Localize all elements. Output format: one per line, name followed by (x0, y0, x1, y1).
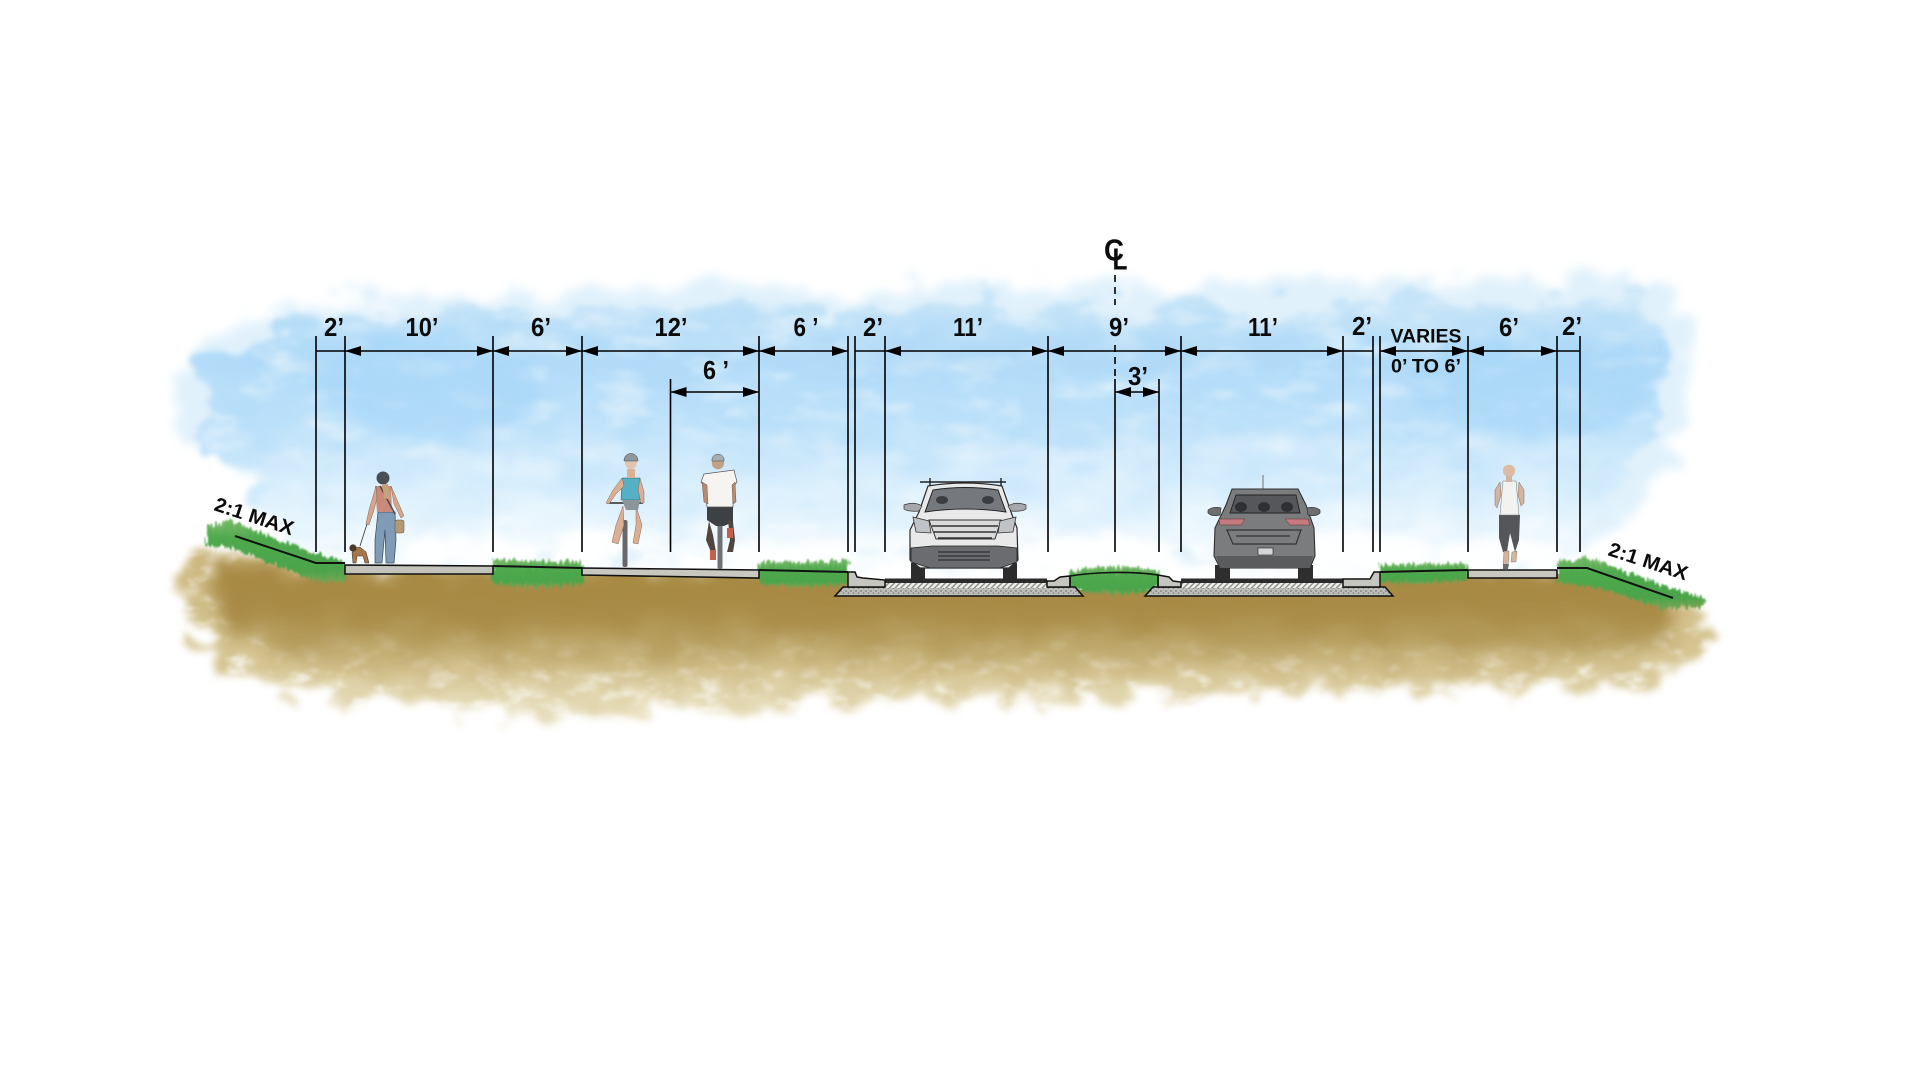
license plate (1258, 548, 1273, 555)
label 11ft lane: 11’ (953, 312, 983, 342)
label 0 to 6: 0’ TO 6’ (1391, 356, 1461, 378)
right slope label: 2:1 MAX (1606, 539, 1691, 585)
dimension labels (324, 311, 1582, 391)
cyclist facing viewer (606, 454, 644, 567)
jogger (1495, 465, 1524, 569)
antenna (1262, 475, 1264, 489)
passengers (1235, 502, 1293, 512)
label 9ft median: 9’ (1109, 312, 1129, 342)
deep blue patch left (320, 333, 540, 437)
body (1214, 489, 1315, 568)
roadway right (1145, 572, 1393, 596)
left slope label: 2:1 MAX (212, 494, 297, 540)
pale sky halo (180, 274, 1691, 560)
deep blue patch right (1405, 335, 1655, 435)
label 2ft shoulder: 2’ (863, 312, 883, 342)
sky watercolor wash (200, 299, 1667, 565)
grass: between path and bikeway (493, 560, 582, 587)
median top line (1070, 572, 1158, 587)
centerline symbol: C (1104, 232, 1124, 268)
label 11ft lane right: 11’ (1248, 312, 1278, 342)
centerline dashed (1114, 275, 1116, 379)
headlights (913, 517, 1016, 533)
label 6ft buffer: 6 ’ (794, 312, 818, 342)
lower bumper (911, 546, 1017, 568)
body (910, 483, 1018, 568)
pedestrian walking dog (349, 472, 404, 563)
label 2ft shoulder right: 2’ (1352, 311, 1372, 341)
roadway left (835, 572, 1083, 596)
mirrors (904, 503, 1026, 511)
label 12ft: 12’ (654, 312, 688, 342)
label varies: VARIES (1390, 326, 1462, 348)
label 2ft right: 2’ (1562, 311, 1582, 341)
dimension lines and arrows (316, 351, 1580, 392)
ground surface line (235, 536, 1673, 598)
grass: right slope (1557, 557, 1705, 608)
label 2ft: 2’ (324, 312, 344, 342)
low white clouds along the horizon (400, 435, 1565, 576)
grass: bikeway buffer (759, 561, 848, 587)
mirrors (1208, 507, 1320, 516)
tires (911, 563, 1017, 580)
soil watercolor wash (181, 545, 1707, 716)
road cross-section diagram (169, 239, 1722, 730)
dark soil core (211, 560, 1673, 694)
tires (1215, 565, 1313, 581)
windshield (925, 488, 1006, 512)
grass: left slope (207, 520, 345, 582)
extension lines (316, 336, 1580, 552)
cyclist riding away (701, 454, 737, 569)
grass strips (207, 520, 1705, 608)
sidewalk slab (1468, 570, 1557, 578)
roof rack (920, 478, 1006, 488)
label 10ft: 10’ (406, 312, 438, 342)
trunk lines (1227, 530, 1301, 544)
shared-use path slab (345, 565, 493, 574)
rear window (1230, 495, 1300, 513)
label 6ft: 6’ (531, 312, 551, 342)
label 3ft: 3’ (1128, 361, 1148, 391)
pale mottled soil fringe (181, 545, 1707, 716)
grass: right verge (1380, 563, 1468, 584)
centerline symbol: L (1112, 242, 1128, 276)
sedan rear view (1208, 475, 1320, 581)
seats (936, 496, 994, 504)
upper blue band (780, 328, 1300, 376)
bikeway slab (582, 568, 759, 578)
label 6ft half bikeway: 6 ’ (703, 355, 729, 385)
grille (929, 520, 1001, 539)
bumper (1216, 556, 1313, 568)
label 6ft sidewalk: 6’ (1499, 312, 1519, 342)
SUV front view (904, 478, 1026, 580)
grass: median (1070, 566, 1158, 595)
tail lights (1219, 519, 1310, 525)
